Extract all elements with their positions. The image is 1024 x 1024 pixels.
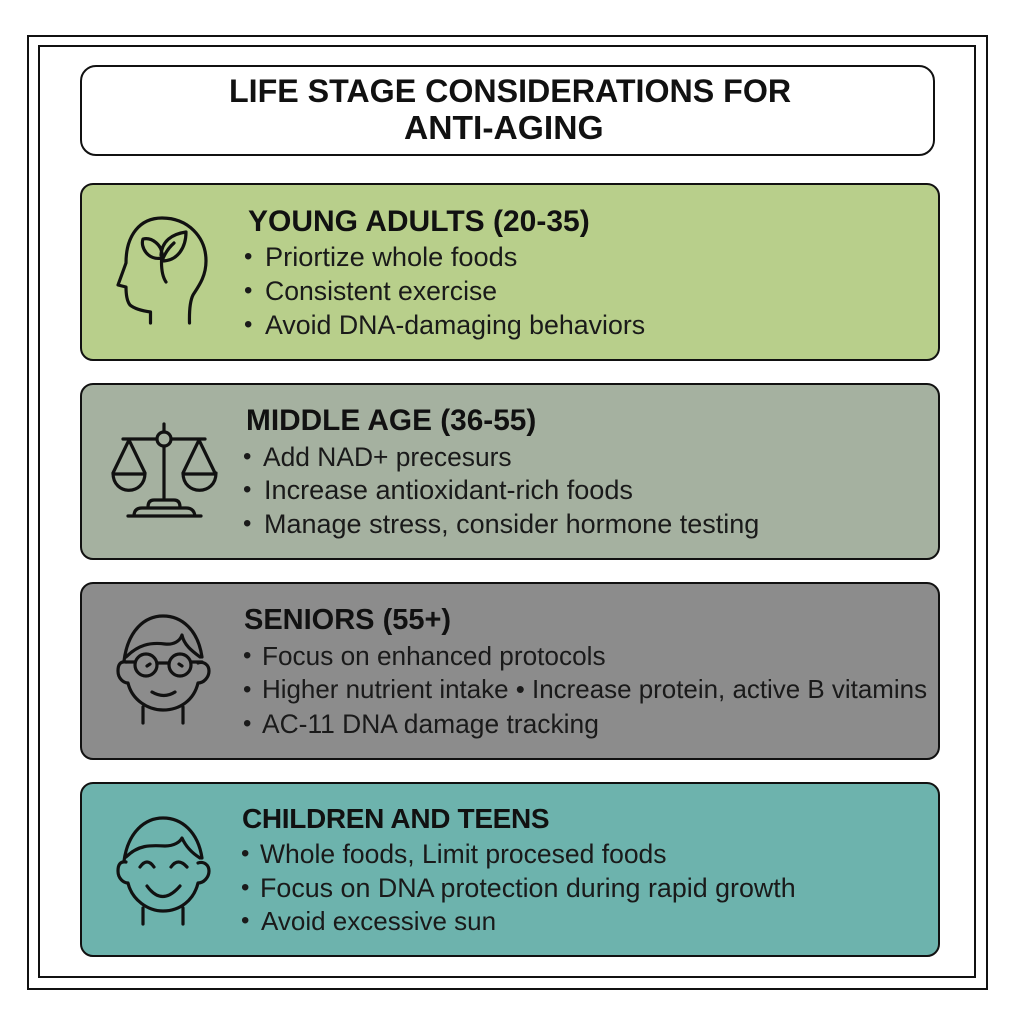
icon: head with leaf bbox=[116, 216, 208, 325]
icon: senior face with glasses bbox=[116, 614, 211, 725]
text: young adults list: Priortize whole foods bbox=[265, 241, 517, 272]
text: seniors list: AC-11 DNA damage tracking bbox=[262, 709, 599, 739]
heading: children and teens: CHILDREN AND TEENS bbox=[242, 803, 549, 834]
text: children and teens list: • bbox=[241, 840, 249, 867]
title bbox=[80, 65, 935, 156]
icon: balance scale bbox=[111, 422, 218, 518]
heading: middle age: MIDDLE AGE (36-55) bbox=[246, 404, 536, 437]
text: children and teens list: • bbox=[241, 874, 249, 901]
text: middle age list: • bbox=[243, 443, 251, 470]
text: children and teens list: Whole foods, Limit procesed foods bbox=[260, 839, 667, 869]
text: young adults list: Consistent exercise bbox=[265, 276, 497, 306]
text: young adults list: • bbox=[244, 243, 252, 270]
text: young adults list: • bbox=[244, 311, 252, 338]
heading: seniors: SENIORS (55+) bbox=[244, 604, 451, 636]
text: seniors list: Focus on enhanced protocols bbox=[262, 641, 606, 671]
text: middle age list: Manage stress, consider hormone testing bbox=[264, 509, 759, 539]
text: young adults list: • bbox=[244, 277, 252, 304]
text: middle age list: Increase antioxidant-rich foods bbox=[264, 474, 633, 505]
panel: children and teens bbox=[80, 782, 940, 957]
panel: seniors bbox=[80, 582, 940, 760]
text: middle age list: • bbox=[243, 510, 251, 537]
text: seniors list: • bbox=[243, 710, 251, 737]
text: young adults list bbox=[244, 241, 645, 340]
text: middle age list: • bbox=[243, 476, 251, 503]
text: seniors list: • bbox=[243, 642, 251, 669]
text: middle age list bbox=[243, 442, 759, 539]
text: children and teens list: • bbox=[241, 907, 249, 934]
heading: young adults: YOUNG ADULTS (20-35) bbox=[248, 205, 590, 238]
text: children and teens list bbox=[241, 839, 796, 936]
title: LIFE STAGE CONSIDERATIONS FOR bbox=[229, 73, 791, 109]
panel: young adults bbox=[80, 183, 940, 361]
text: children and teens list: Avoid excessive sun bbox=[261, 906, 496, 936]
icon: child smiling face bbox=[116, 816, 211, 926]
panel: middle age bbox=[80, 383, 940, 560]
text: children and teens list: Focus on DNA protection during rapid growth bbox=[260, 873, 796, 903]
text: seniors list: • bbox=[243, 676, 251, 703]
text: young adults list: Avoid DNA-damaging behaviors bbox=[265, 310, 645, 340]
text: middle age list: Add NAD+ precesurs bbox=[263, 442, 512, 472]
title: ANTI-AGING bbox=[404, 110, 604, 147]
text: seniors list bbox=[243, 641, 927, 739]
text: seniors list: Higher nutrient intake • Increase protein, active B vitamins bbox=[262, 676, 927, 704]
